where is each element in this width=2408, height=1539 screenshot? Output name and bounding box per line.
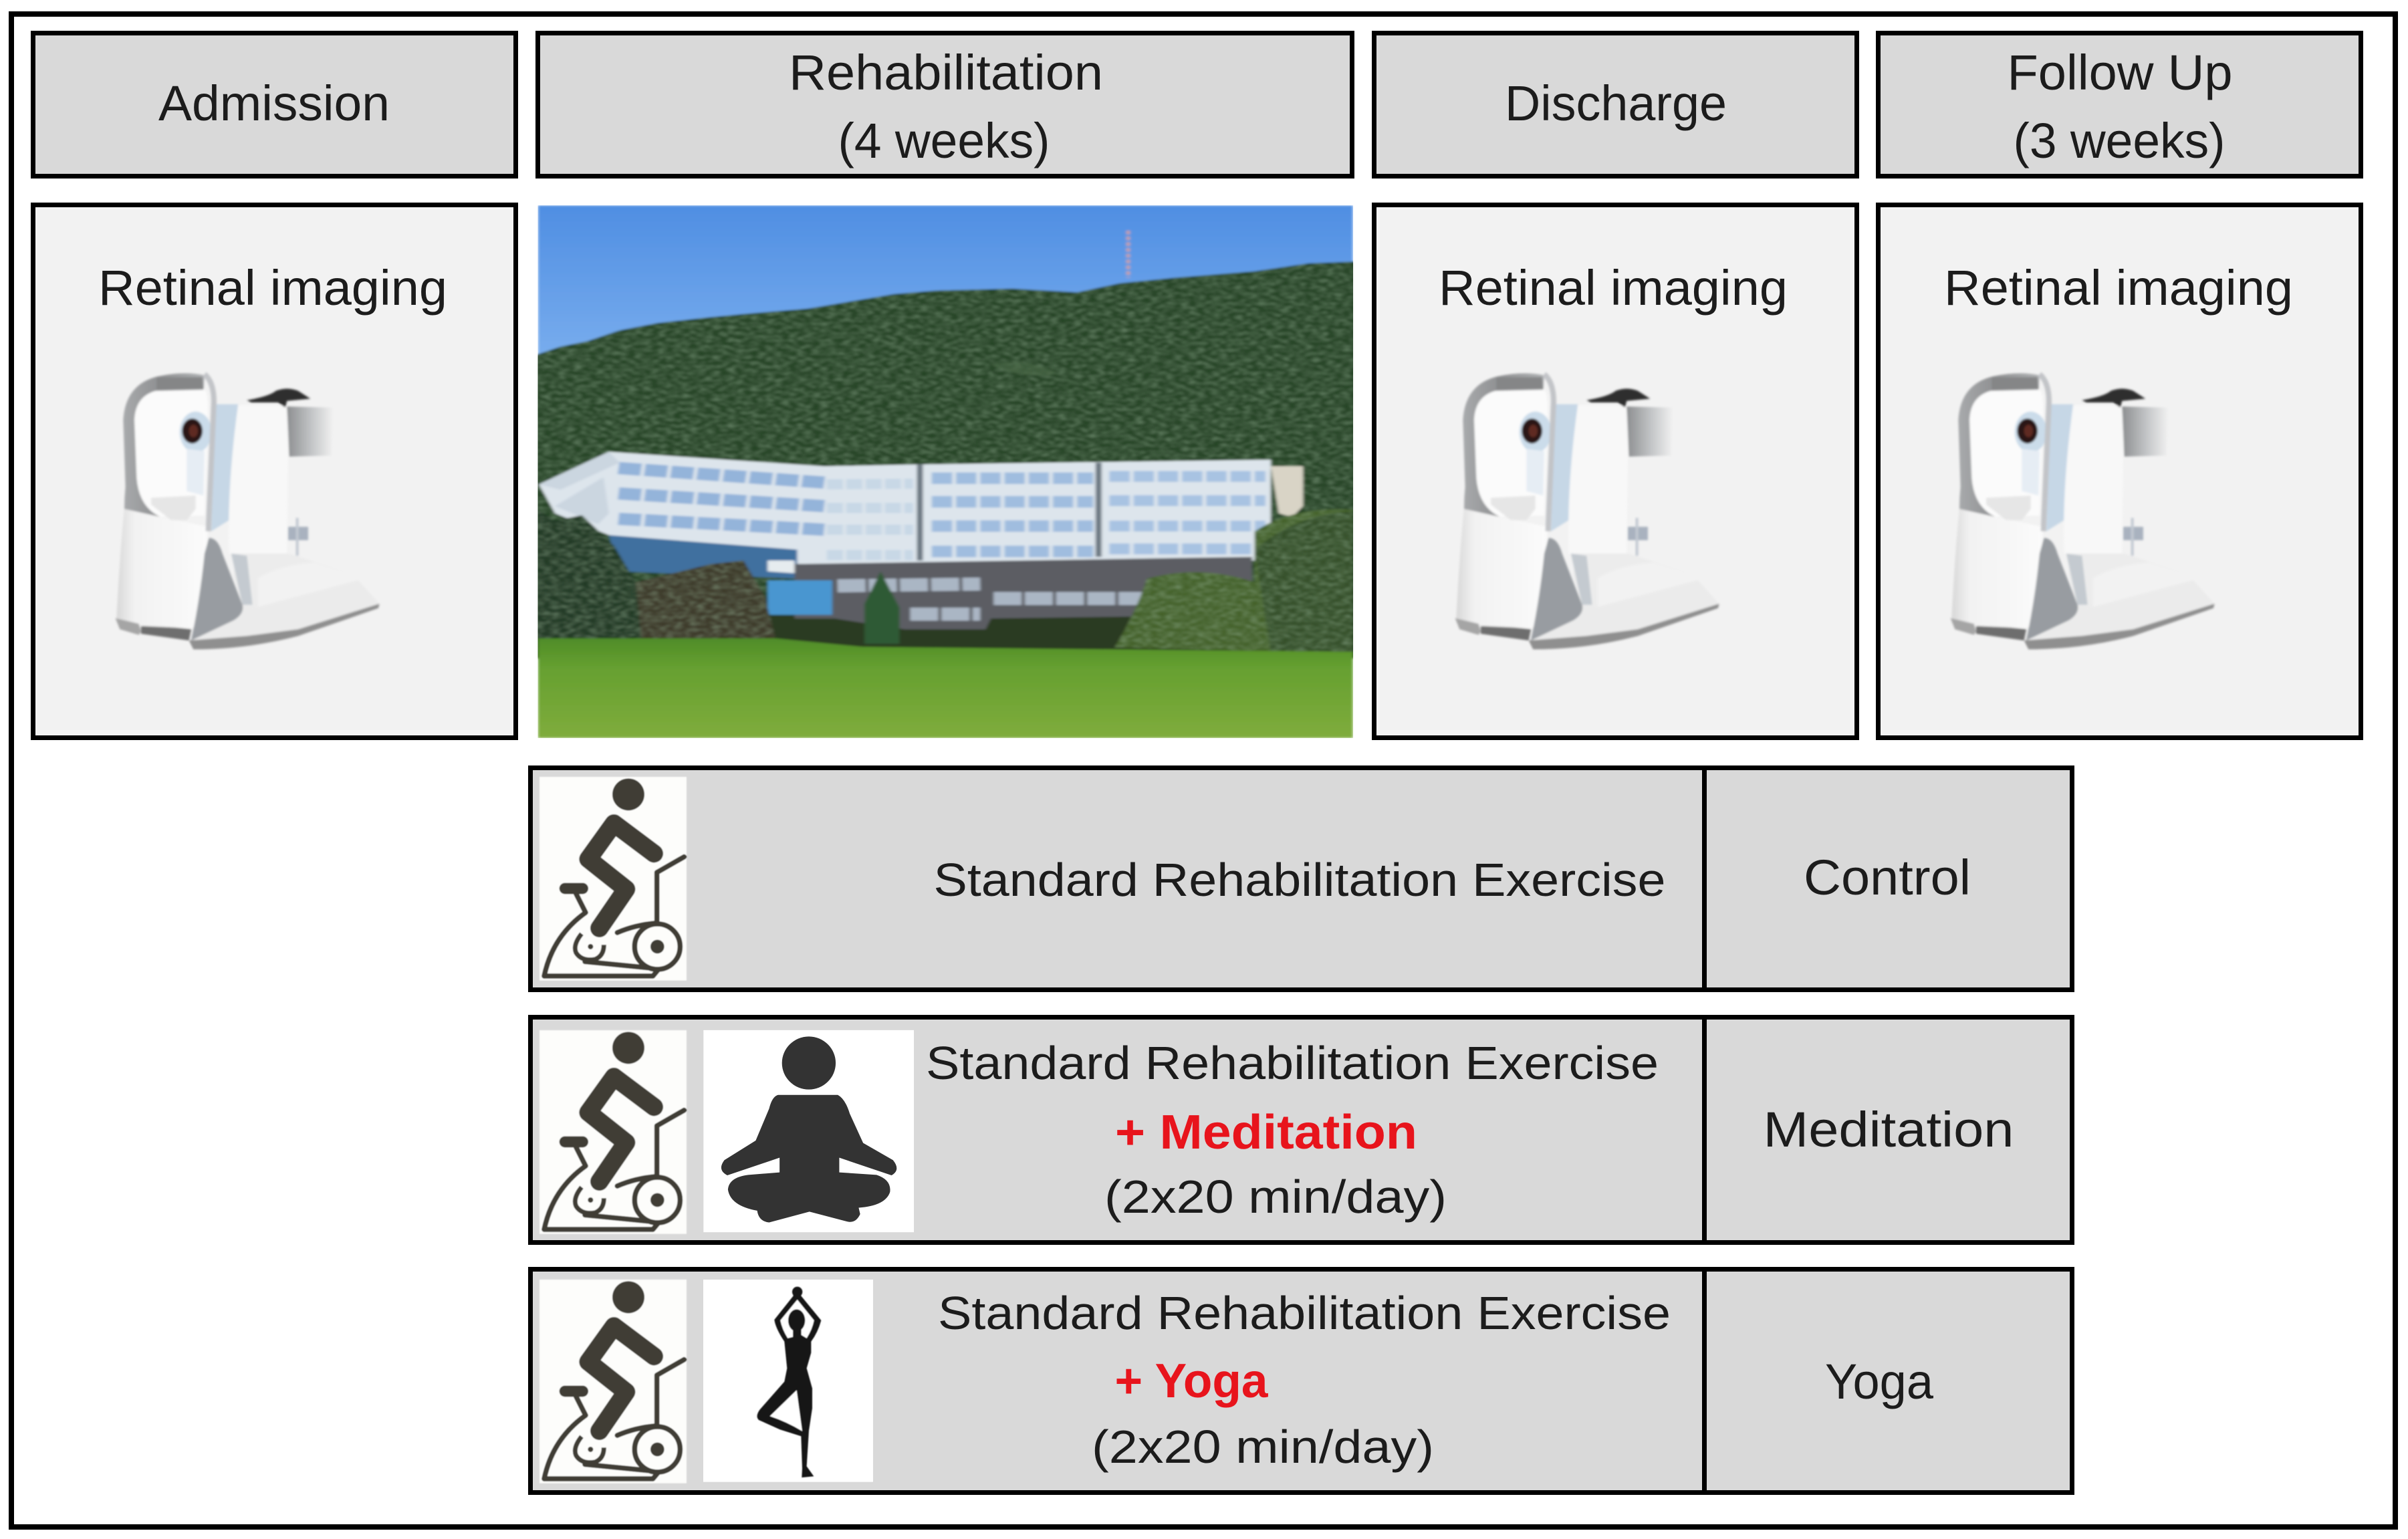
panel: follow up retinal imaging: Retinal imaging <box>1944 260 2293 316</box>
row: control group <box>531 767 2072 989</box>
row: control group: Standard Rehabilitation Exercise <box>933 854 1666 906</box>
icon: exercise bike <box>539 777 687 981</box>
row: meditation group: + Meditation <box>1115 1106 1417 1159</box>
row: meditation group: Meditation <box>1764 1102 2014 1157</box>
icon: retinal imaging device <box>116 373 380 649</box>
panel: admission retinal imaging <box>33 205 516 738</box>
header: Follow Up <box>1879 33 2361 176</box>
header: Discharge: Discharge <box>1505 76 1727 131</box>
header: Admission: Admission <box>158 76 390 131</box>
row: yoga group <box>531 1269 2072 1493</box>
header: Rehabilitation <box>537 33 1352 176</box>
panel: follow up retinal imaging <box>1879 205 2361 738</box>
header: Follow Up: (3 weeks) <box>2014 113 2225 168</box>
row: meditation group: Standard Rehabilitation Exercise <box>926 1037 1659 1089</box>
panel: admission retinal imaging: Retinal imaging <box>98 260 447 316</box>
panel: discharge retinal imaging: Retinal imaging <box>1439 260 1788 316</box>
panel: discharge retinal imaging <box>1374 205 1857 738</box>
header: Rehabilitation: (4 weeks) <box>838 113 1050 168</box>
icon: yoga tree pose <box>703 1280 873 1482</box>
header: Follow Up: Follow Up <box>2007 45 2233 100</box>
header: Discharge <box>1374 33 1857 176</box>
header: Admission <box>33 33 516 176</box>
header: Rehabilitation: Rehabilitation <box>789 45 1103 100</box>
icon: exercise bike <box>539 1030 687 1234</box>
row: yoga group: + Yoga <box>1115 1354 1268 1408</box>
icon: retinal imaging device <box>1951 373 2215 649</box>
row: yoga group: (2x20 min/day) <box>1092 1421 1434 1473</box>
icon: exercise bike <box>539 1280 687 1484</box>
row: meditation group <box>531 1018 2072 1243</box>
icon: retinal imaging device <box>1455 373 1719 649</box>
row: control group: Control <box>1804 850 1971 905</box>
row: yoga group: Yoga <box>1825 1354 1934 1409</box>
icon: meditating person <box>703 1030 914 1232</box>
row: meditation group: (2x20 min/day) <box>1104 1171 1447 1223</box>
photo: rehabilitation clinic <box>528 205 1357 738</box>
row: yoga group: Standard Rehabilitation Exercise <box>938 1287 1671 1339</box>
